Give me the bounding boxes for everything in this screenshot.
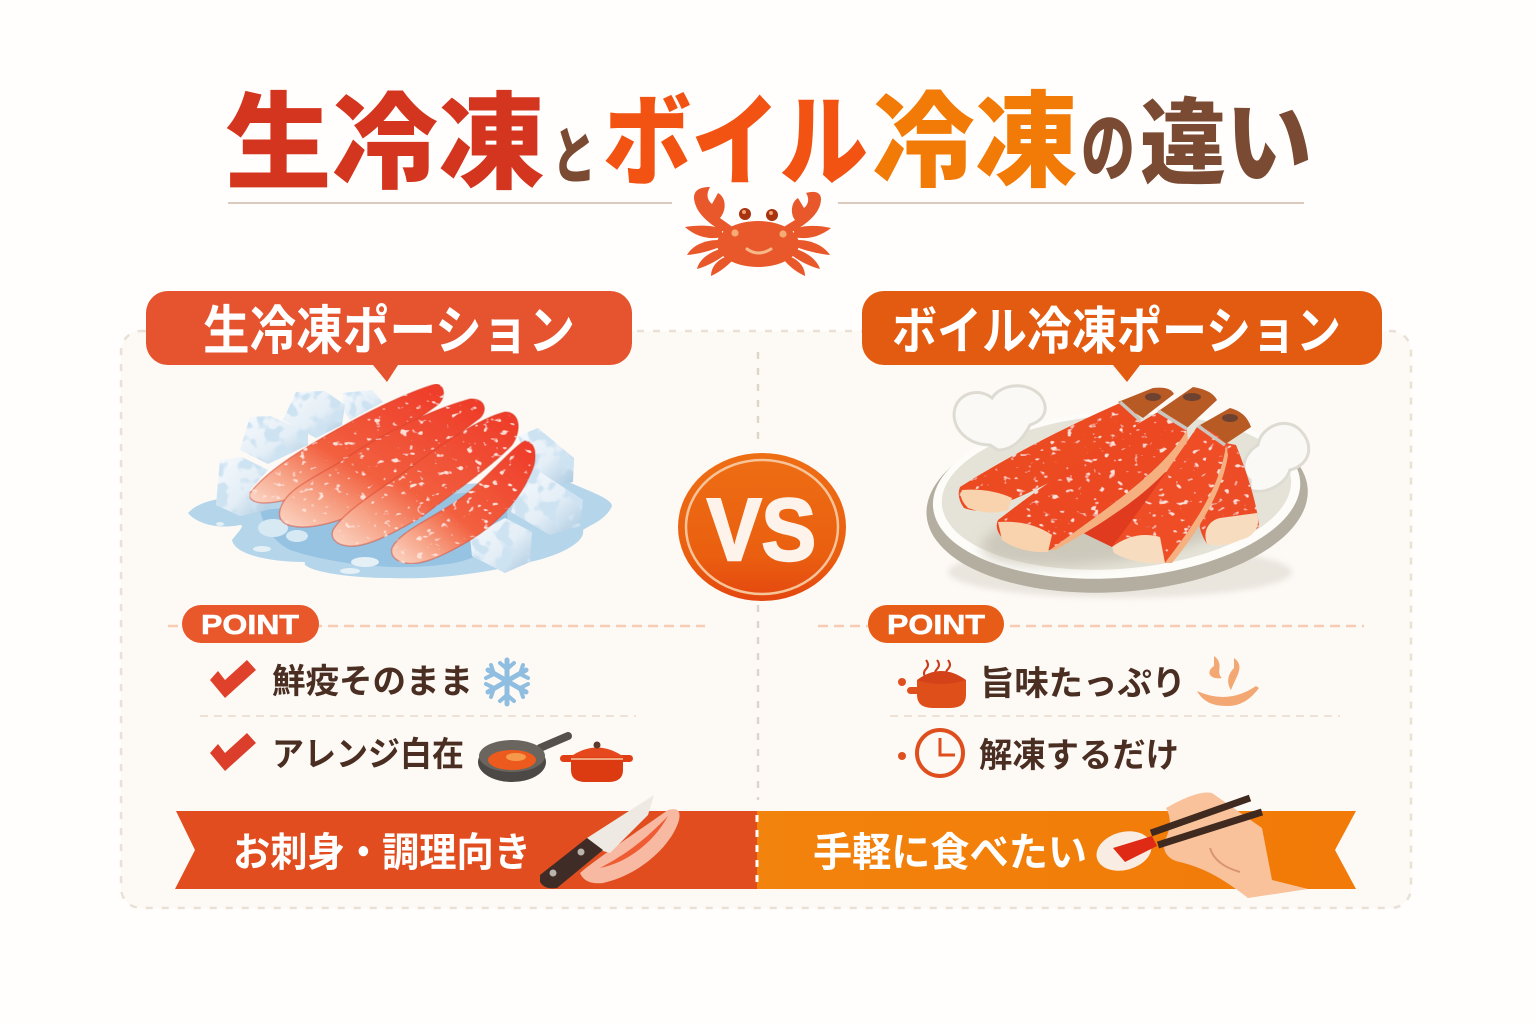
ribbon: left: お刺身・調理向き <box>233 820 531 878</box>
badge: boiled frozen heading: ボイル冷凍ポーション <box>892 290 1341 364</box>
icon: clock <box>917 730 963 776</box>
ribbon: right <box>757 792 1356 898</box>
POINT tag <box>868 605 1004 643</box>
right point section <box>818 605 1364 777</box>
bullet 1 <box>898 678 906 686</box>
icon: steaming pot <box>907 660 966 708</box>
item: just thaw: 解凍するだけ <box>979 728 1179 777</box>
stick A <box>959 403 1141 511</box>
ribbon: left <box>175 795 757 889</box>
title: 生冷凍 <box>225 86 545 203</box>
stick B <box>997 412 1187 550</box>
title: ボイル <box>603 87 868 199</box>
left point section <box>168 605 705 782</box>
plate shadow under sticks <box>977 480 1243 580</box>
ribbon divider <box>756 815 758 885</box>
plate <box>920 397 1314 605</box>
POINT tag: POINT <box>201 609 299 640</box>
title: 違い <box>1140 91 1312 196</box>
silver bands <box>1120 402 1225 445</box>
icon: hand with chopsticks <box>1092 792 1308 898</box>
icon: frying pan <box>478 736 568 782</box>
panel: comparison card <box>121 331 1411 908</box>
bullet 2 <box>898 752 906 760</box>
back sticks <box>1083 465 1180 547</box>
badge: raw frozen heading: 生冷凍ポーション <box>203 289 575 365</box>
illustration: raw crab portions on ice <box>188 384 612 578</box>
icon: steam smile <box>1197 656 1259 706</box>
stick C <box>1112 427 1226 563</box>
crab sticks <box>250 384 535 564</box>
badge: VS <box>678 453 846 601</box>
item: freshness: 鮮疫そのまま <box>272 654 473 703</box>
POINT tag: POINT <box>887 609 985 640</box>
icon: snowflake <box>486 660 528 704</box>
illustration: boiled crab portions on plate <box>920 386 1314 605</box>
icon: sashimi slice and knife <box>540 795 680 888</box>
steam clouds <box>954 386 1309 491</box>
badge: VS: VS <box>707 480 816 579</box>
brown shell ends <box>1118 387 1251 445</box>
ribbon: right: 手軽に食べたい <box>813 820 1087 878</box>
title: 冷凍 <box>872 85 1078 201</box>
icon: crab <box>685 187 831 276</box>
title divider <box>228 202 1304 204</box>
title <box>225 85 1312 203</box>
item: umami: 旨味たっぷり <box>980 656 1186 705</box>
water puddle <box>188 478 612 578</box>
POINT tag <box>182 605 319 643</box>
title: と <box>552 123 596 192</box>
title: の <box>1081 107 1135 192</box>
check mark 2 <box>210 733 256 771</box>
item: arrange: アレンジ白在 <box>272 727 464 776</box>
ice cubes <box>216 390 583 573</box>
icon: pot <box>560 742 633 782</box>
check mark 1 <box>210 660 256 698</box>
